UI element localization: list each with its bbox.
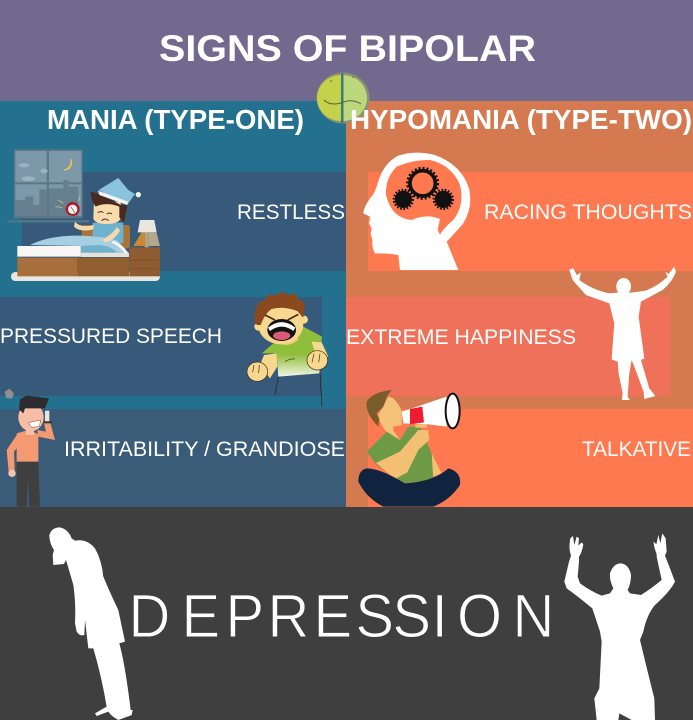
icon: slumped figure silhouette xyxy=(49,527,133,720)
label: irritability / grandiose: IRRITABILITY / GRANDIOSE xyxy=(64,437,345,461)
panel: title banner xyxy=(0,0,693,101)
panel: hypomania xyxy=(346,101,693,507)
panel: mania xyxy=(0,101,346,507)
icon: irritated man on phone xyxy=(5,389,55,507)
label: extreme happiness: EXTREME HAPPINESS xyxy=(346,325,576,349)
icon: person awake in bed with alarm clock xyxy=(7,149,160,281)
label: restless: RESTLESS xyxy=(237,200,345,224)
heading: depression: DEPRESSION xyxy=(129,582,554,650)
icon: celebrating man silhouette xyxy=(569,267,676,400)
icon: shouting boy xyxy=(247,292,328,407)
label: pressured speech: PRESSURED SPEECH xyxy=(0,324,222,348)
icon: two-sided sad face xyxy=(316,72,370,124)
heading: mania: MANIA (TYPE-ONE) xyxy=(47,104,304,135)
label: racing thoughts: RACING THOUGHTS xyxy=(484,200,692,224)
icon: head with gears xyxy=(363,153,470,270)
label: talkative: TALKATIVE xyxy=(582,437,691,461)
panel: depression xyxy=(0,507,693,720)
heading: hypomania: HYPOMANIA (TYPE-TWO) xyxy=(350,104,692,135)
icon: man with megaphone xyxy=(358,390,460,507)
icon: figure with raised arms silhouette xyxy=(564,533,675,720)
title: SIGNS OF BIPOLAR xyxy=(159,28,536,69)
